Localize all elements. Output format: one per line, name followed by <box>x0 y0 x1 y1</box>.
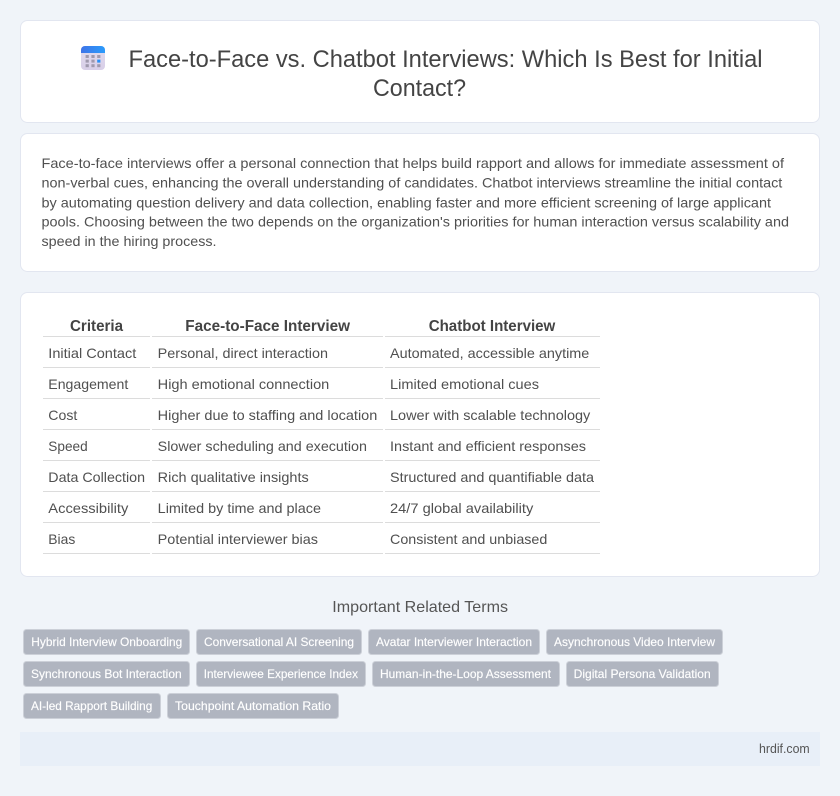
text block: introduction paragraph: pools. Choosing between the two depends on the organization's priorities for human interaction versus scalability and <box>42 214 789 230</box>
tag: Asynchronous Video Interview: Asynchronous Video Interview <box>554 635 715 649</box>
tag: Avatar Interviewer Interaction <box>368 630 540 654</box>
title: Face-to-Face vs. Chatbot Interviews: Which Is Best for Initial <box>128 46 762 73</box>
footer bar <box>20 732 820 766</box>
tag: Human-in-the-Loop Assessment <box>372 662 560 686</box>
row: accessibility: Limited by time and place <box>158 500 321 516</box>
tag: Synchronous Bot Interaction <box>24 662 190 686</box>
row: speed: Slower scheduling and execution <box>158 438 367 454</box>
tag: Touchpoint Automation Ratio: Touchpoint Automation Ratio <box>175 699 331 713</box>
row: accessibility: 24/7 global availability <box>390 500 533 516</box>
tag: Synchronous Bot Interaction: Synchronous Bot Interaction <box>31 667 182 681</box>
text block: introduction paragraph: speed in the hiring process. <box>42 233 216 249</box>
icon: calendar <box>81 46 105 70</box>
title: Contact? <box>373 75 466 102</box>
tag: Digital Persona Validation: Digital Persona Validation <box>574 667 711 681</box>
footer credit: hrdif.com <box>759 742 810 756</box>
panel: introduction <box>20 134 820 272</box>
row: initial contact: Initial Contact <box>48 345 136 361</box>
panel: related term tags <box>24 630 722 718</box>
row: data collection: Structured and quantifiable data <box>390 469 594 485</box>
text block: introduction paragraph <box>42 155 789 249</box>
row: engagement: Limited emotional cues <box>390 376 539 392</box>
tag: Interviewee Experience Index <box>196 662 366 686</box>
row: engagement: Engagement <box>48 376 128 392</box>
heading: important related terms: Important Related Terms <box>332 599 508 616</box>
row: speed: Speed <box>48 438 88 454</box>
tag: Hybrid Interview Onboarding <box>24 630 190 654</box>
text block: introduction paragraph: non-verbal cues, enhancing the overall understanding of candidates. Chatbot interviews streamline the initial contact <box>42 174 782 190</box>
text block: introduction paragraph: by automating question delivery and data collection, enabling faster and more efficient screening of large applicant <box>42 194 771 210</box>
row: bias <box>48 531 547 547</box>
tag: Asynchronous Video Interview <box>546 630 722 654</box>
tag: Touchpoint Automation Ratio <box>168 694 338 718</box>
row: initial contact <box>48 345 590 361</box>
row: cost <box>48 407 590 423</box>
tag: Interviewee Experience Index: Interviewee Experience Index <box>204 667 358 681</box>
row: bias: Potential interviewer bias <box>158 531 318 547</box>
row: engagement <box>48 376 539 392</box>
row: accessibility: Accessibility <box>48 500 128 516</box>
tag: Avatar Interviewer Interaction: Avatar Interviewer Interaction <box>376 635 532 649</box>
tag: Human-in-the-Loop Assessment: Human-in-the-Loop Assessment <box>380 667 552 681</box>
row: data collection: Rich qualitative insights <box>158 469 309 485</box>
row: speed <box>48 438 586 454</box>
table header row <box>70 318 556 335</box>
title <box>128 46 762 102</box>
table header row: Criteria <box>70 318 123 335</box>
row: data collection: Data Collection <box>48 469 145 485</box>
row: speed: Instant and efficient responses <box>390 438 586 454</box>
row: cost: Lower with scalable technology <box>390 407 590 423</box>
row: data collection <box>48 469 594 485</box>
tag: AI-led Rapport Building: AI-led Rapport Building <box>31 699 152 713</box>
tag: Hybrid Interview Onboarding: Hybrid Interview Onboarding <box>31 635 182 649</box>
table header row: Chatbot Interview <box>429 318 556 335</box>
panel: comparison table <box>20 292 820 576</box>
tag: Digital Persona Validation <box>566 662 718 686</box>
row: cost: Cost <box>48 407 77 423</box>
text block: introduction paragraph: Face-to-face interviews offer a personal connection that helps build rapport and allows for immediate assessment of <box>42 155 784 171</box>
table header row: Face-to-Face Interview <box>185 318 351 335</box>
row: initial contact: Automated, accessible anytime <box>390 345 590 361</box>
tag: Conversational AI Screening: Conversational AI Screening <box>204 635 354 649</box>
row: cost: Higher due to staffing and location <box>158 407 377 423</box>
tag: AI-led Rapport Building <box>24 694 160 718</box>
row: engagement: High emotional connection <box>158 376 329 392</box>
tag: Conversational AI Screening <box>196 630 362 654</box>
row: accessibility <box>48 500 533 516</box>
row: initial contact: Personal, direct interaction <box>158 345 328 361</box>
row: bias: Bias <box>48 531 75 547</box>
row: bias: Consistent and unbiased <box>390 531 547 547</box>
panel: title header <box>20 20 820 122</box>
